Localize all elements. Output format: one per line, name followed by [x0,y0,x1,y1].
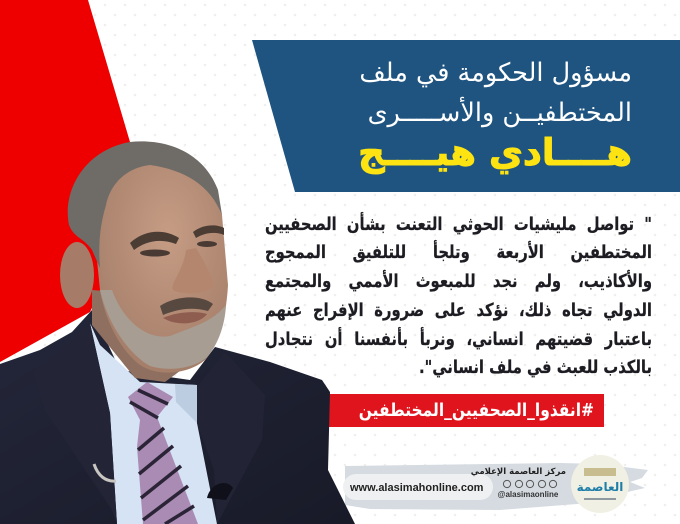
beard [100,290,226,369]
name in yellow: هــــادي هيــــج [358,131,632,174]
website url: www.alasimahonline.com [350,482,483,494]
eye right [197,241,217,247]
social icons [503,480,557,488]
title panel [252,40,680,192]
title line 2: المختطفيــن والأســـــرى [368,98,632,128]
moustache [160,297,213,315]
footer url pill [343,474,493,500]
hair [68,141,222,268]
face [95,160,228,373]
nose shadow [173,248,214,293]
logo wordmark: العاصمة [577,480,623,494]
quote text block: بالكذب للعبث في ملف انساني". [419,357,652,378]
microphone left [94,464,116,481]
microphone right [207,483,233,500]
shirt collar shadow [175,384,197,423]
hashtag bar [320,394,604,427]
quote text block: المختطفين الأربعة وتلجأ للتلفيق الممجوج [265,242,652,263]
neck [92,290,215,382]
ear [60,242,94,308]
red background shape [0,0,130,362]
eyebrow left [130,232,179,250]
quote text block: الدولي تجاه ذلك، نؤكد على ضرورة الإفراج عنهم [265,300,652,321]
media centre name: مركز العاصمة الإعلامي [471,467,566,477]
quote text block: والأكاذيب، ولم نجد للمبعوث الأممي والمجتمع [265,271,652,292]
hashtag text: #انقذوا_الصحفيين_المختطفين [359,400,594,421]
title line 1: مسؤول الحكومة في ملف [359,58,632,88]
jacket lapel left [33,323,117,524]
jacket lapel right [197,352,265,524]
quote text block: " تواصل مليشيات الحوثي التعنت بشأن الصحفيين [265,214,652,235]
eyebrow right [193,225,224,238]
social handle: @alasimaonline [498,490,558,499]
eye left [140,250,170,256]
footer brush band [345,463,648,510]
necktie [128,382,198,524]
mouth [163,312,207,323]
shirt [90,323,217,524]
footer logo [571,455,629,513]
portrait of the speaker [0,141,355,524]
suit jacket [0,310,355,524]
quote text block [265,212,652,378]
quote text block: باعتبار قضيتهم انساني، ونربأ بأنفسنا أن نتجادل [265,329,652,350]
